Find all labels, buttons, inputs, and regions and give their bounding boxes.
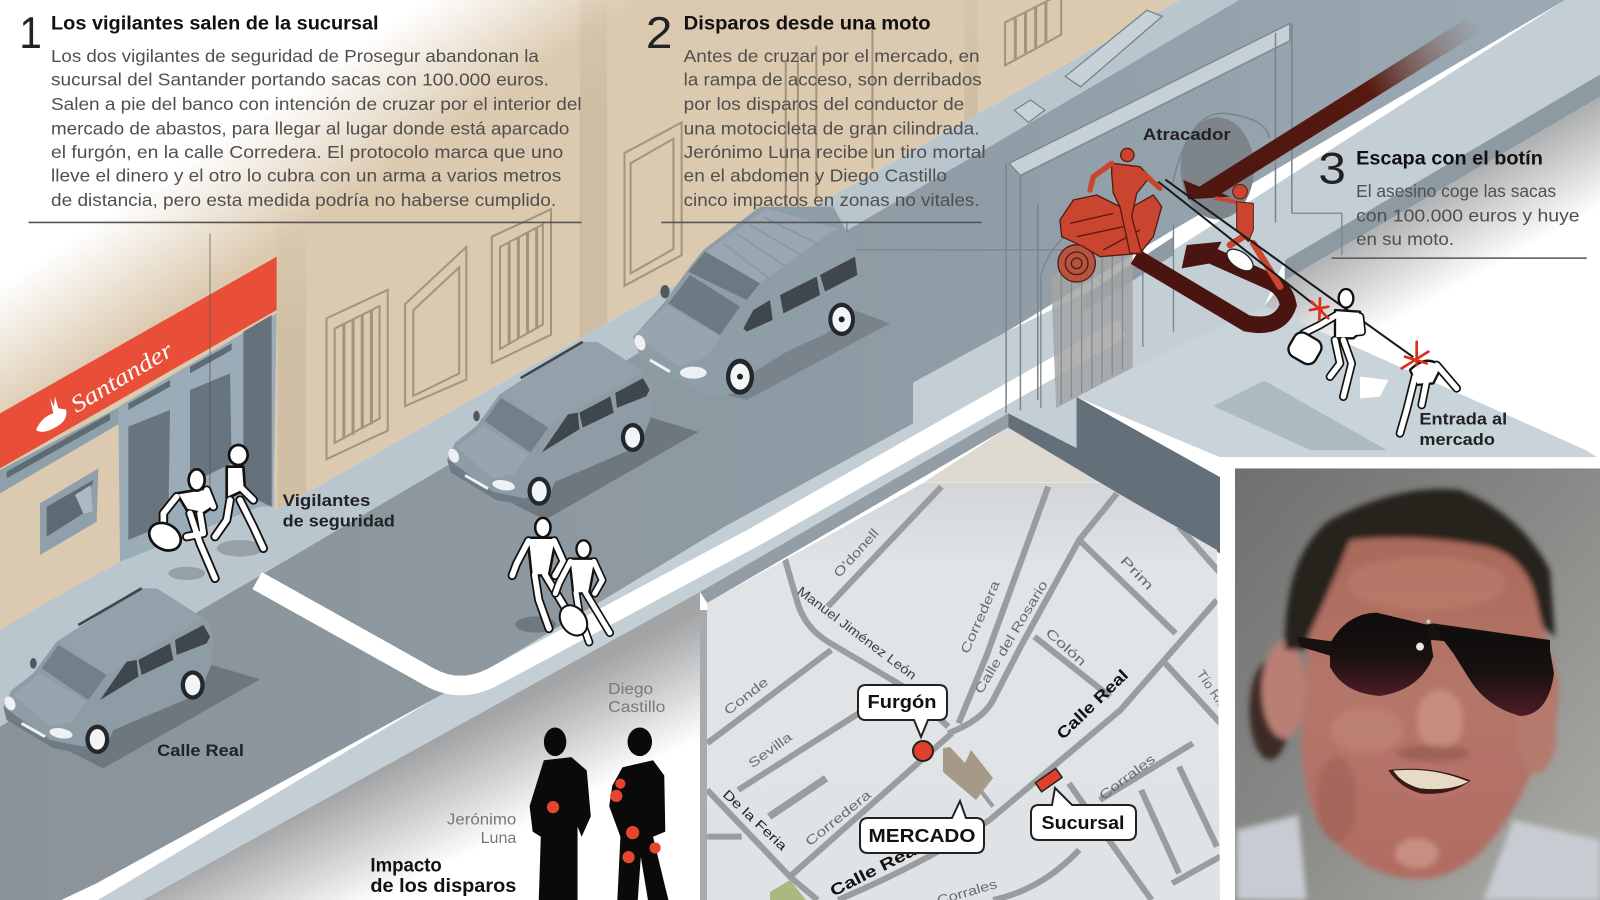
- label: diego castillo: Castillo: [608, 699, 665, 716]
- face: [1302, 538, 1558, 879]
- wound: [547, 801, 559, 813]
- upper sidewalk: [0, 0, 1239, 727]
- photo frame: [1220, 457, 1600, 900]
- street names: Tío Rico: [1194, 667, 1234, 717]
- label: vigilantes de seguridad: [283, 492, 395, 531]
- van: middle: [446, 342, 699, 520]
- santander flame logo: [36, 397, 66, 432]
- van: calle real: [2, 588, 260, 768]
- vans: [2, 207, 890, 768]
- street names: Corredera: [957, 577, 1003, 656]
- ear: [1249, 660, 1291, 760]
- attacker on motorcycle: [1058, 148, 1162, 282]
- entrance arrow: [1360, 377, 1388, 398]
- label: vigilantes de seguridad: Vigilantes: [283, 492, 370, 510]
- step 2 text: cinco impactos en zonas no vitales.: [684, 190, 980, 210]
- street names: Colón: [1043, 625, 1089, 669]
- label: impacto de los disparos: [370, 854, 516, 897]
- label: atracador: Atracador: [1143, 126, 1231, 144]
- step 1 text: Los dos vigilantes de seguridad de Prosegur abandonan la: [51, 46, 539, 66]
- santander banner: [0, 257, 277, 468]
- step 2 text: por los disparos del conductor de: [684, 94, 964, 114]
- step 3 text: [1356, 181, 1580, 249]
- van: far, high roof: [633, 207, 890, 400]
- step 2 text: una motocicleta de gran cilindrada.: [684, 119, 980, 139]
- santander wordmark: Santander: [66, 337, 178, 418]
- bullet trajectory lines: [1158, 180, 1413, 357]
- street names: O'donell: [830, 526, 882, 580]
- street names: De la Feria: [720, 787, 791, 854]
- step 3 number: 3: [1318, 143, 1346, 194]
- shadow upper right: [1264, 97, 1600, 450]
- callout: furgon: Furgón: [868, 692, 936, 712]
- street names: Calle del Rosario: [971, 578, 1051, 696]
- step 3 text: en su moto.: [1356, 229, 1454, 249]
- street names: Corredera: [802, 786, 875, 849]
- street names: [720, 526, 1234, 900]
- label: impacto de los disparos: de los disparos: [370, 875, 516, 897]
- market gate outline: [847, 10, 1342, 413]
- label: calle real: Calle Real: [157, 742, 244, 760]
- photo: suspect portrait: [1235, 468, 1600, 900]
- label: impacto de los disparos: Impacto: [370, 854, 442, 876]
- people: guards crossing: [512, 518, 610, 642]
- label: entrada al mercado: [1419, 410, 1507, 449]
- street names: Manuel Jiménez León: [795, 583, 919, 683]
- building wall: [0, 0, 1180, 665]
- step 1 heading: Los vigilantes salen de la sucursal: [51, 13, 379, 35]
- step 1 text: lleve el dinero y el otro lo cubra con un arma a varios metros: [51, 166, 562, 186]
- label: vigilantes de seguridad: de seguridad: [283, 513, 395, 531]
- street names: Calle Real: [828, 840, 924, 900]
- label: jeronimo luna: Jerónimo: [447, 811, 516, 828]
- street names: Conde: [721, 674, 771, 718]
- arrows and attackers: [1058, 18, 1483, 325]
- money bag: [1223, 245, 1257, 275]
- callout: sucursal: [1031, 788, 1136, 840]
- step 2 text: [684, 46, 986, 210]
- step 2 heading: Disparos desde una moto: [684, 13, 931, 35]
- step 1 text: de distancia, pero esta medida podría no haberse cumplido.: [51, 190, 556, 210]
- street names: Corrales: [1096, 751, 1158, 803]
- step 1 text: Salen a pie del banco con intención de cruzar por el interior del: [51, 94, 582, 114]
- silhouette: Diego Castillo: [609, 728, 668, 900]
- panel: locator map: [700, 483, 1234, 900]
- step 2 text: en el abdomen y Diego Castillo: [684, 166, 947, 186]
- wall windows: [327, 0, 1061, 459]
- street names: Sevilla: [745, 729, 795, 771]
- fallen guard: [1400, 361, 1457, 433]
- step 3 heading: Escapa con el botín: [1356, 147, 1543, 169]
- people: security guards walking: [144, 445, 263, 580]
- callout: furgon: [858, 685, 947, 737]
- map marker: branch: [1035, 768, 1062, 792]
- step 3 text: El asesino coge las sacas: [1356, 181, 1556, 201]
- label: entrada al mercado: mercado: [1419, 431, 1495, 449]
- callout: sucursal: Sucursal: [1042, 813, 1124, 833]
- callout: mercado: MERCADO: [868, 826, 976, 846]
- second red figure: [1217, 184, 1280, 287]
- hair: [1285, 489, 1555, 650]
- shadow lower left: [143, 592, 700, 900]
- map streets: [707, 487, 1220, 900]
- mouth: [1385, 763, 1475, 800]
- step 1 text: el furgón, en la calle Corredera. El protocolo marca que uno: [51, 142, 563, 162]
- label: diego castillo: [608, 681, 665, 716]
- step 1 text: sucursal del Santander portando sacas con 100.000 euros.: [51, 70, 549, 90]
- shirt: [1237, 815, 1600, 900]
- label: jeronimo luna: Luna: [481, 830, 517, 847]
- label: entrada al mercado: Entrada al: [1419, 410, 1507, 428]
- step 2 text: la rampa de acceso, son derribados: [684, 70, 982, 90]
- bank facade: [0, 233, 277, 627]
- step 2 number: 2: [646, 7, 672, 58]
- step 1 number: 1: [19, 7, 42, 58]
- people: victims at market entrance: [1285, 289, 1457, 433]
- impact flashes: [1310, 298, 1428, 368]
- step 2 text: Jerónimo Luna recibe un tiro mortal: [684, 142, 986, 162]
- market block: [923, 397, 1224, 556]
- label: diego castillo: Diego: [608, 681, 653, 698]
- step 1 text: [51, 46, 582, 210]
- fleeing guard: [1285, 289, 1363, 397]
- street names: Prim: [1117, 553, 1157, 593]
- map park: [770, 880, 806, 900]
- label: jeronimo luna: [447, 811, 517, 847]
- sunglasses: [1297, 613, 1554, 716]
- arrow: motorcycle approach: [1183, 18, 1483, 199]
- map: market building: [943, 747, 993, 800]
- map marker: van: [913, 741, 933, 761]
- step 2 text: Antes de cruzar por el mercado, en: [684, 46, 980, 66]
- wounds: [610, 779, 661, 863]
- step 1 text: mercado de abastos, para llegar al lugar donde está aparcado: [51, 119, 569, 139]
- street names: Calle Real: [1054, 667, 1132, 743]
- arrow: u-turn escape: [1135, 242, 1288, 325]
- silhouette: Jeronimo Luna: [530, 728, 591, 900]
- step 3 text: con 100.000 euros y huye: [1356, 205, 1580, 225]
- callout: mercado: [860, 801, 984, 853]
